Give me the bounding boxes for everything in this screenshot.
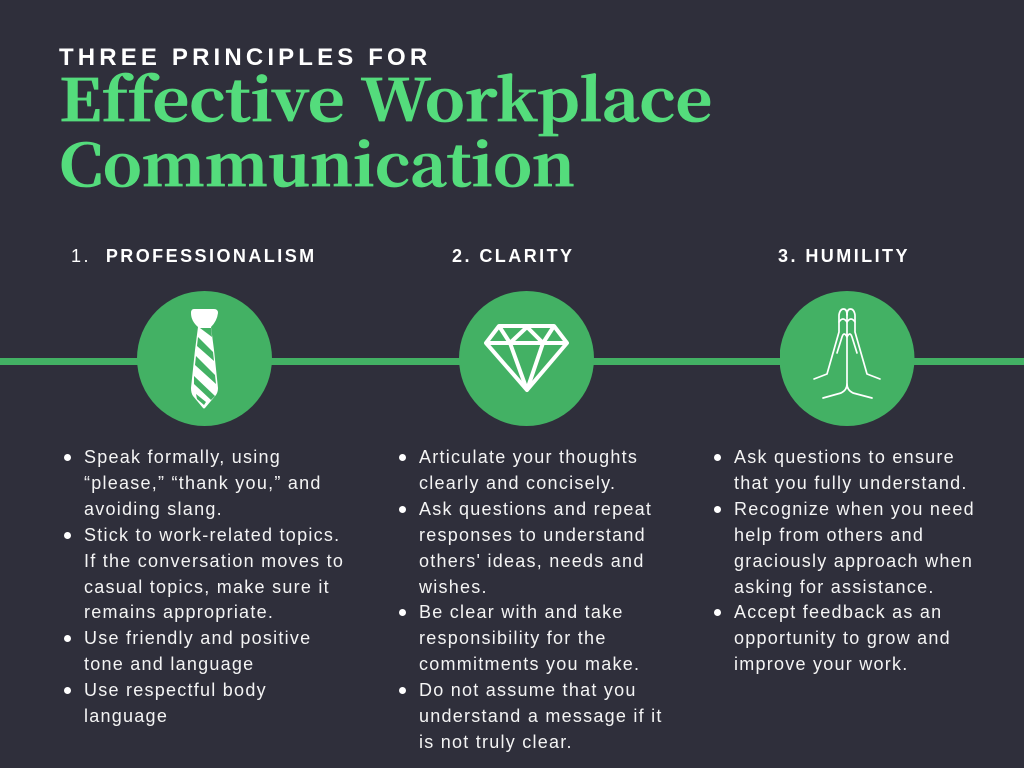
text list: clarity: Articulate your thoughts [419, 447, 638, 467]
heading: humility: 3. HUMILITY [778, 246, 910, 266]
text list: clarity [399, 447, 663, 752]
text list: professionalism: Speak formally, using [84, 447, 281, 467]
text list: professionalism: Stick to work-related topics. [84, 525, 340, 545]
text list: humility: that you fully understand. [734, 473, 968, 493]
main title: Effective Workplace [59, 54, 712, 138]
text list: clarity: Ask questions and repeat [419, 499, 652, 519]
text list: professionalism [64, 447, 344, 726]
icon: necktie [137, 291, 272, 426]
text list: professionalism: language [84, 706, 168, 726]
main title: Communication [59, 119, 575, 203]
text list: clarity: others' ideas, needs and [419, 551, 645, 571]
icon: praying hands [780, 291, 914, 426]
text list: humility: opportunity to grow and [734, 628, 951, 648]
text list: professionalism: avoiding slang. [84, 499, 223, 519]
text list: clarity: understand a message if it [419, 706, 663, 726]
title block [59, 44, 712, 203]
text list: professionalism: tone and language [84, 654, 254, 674]
text list: humility: asking for assistance. [734, 577, 935, 597]
text list: clarity: Be clear with and take [419, 602, 624, 622]
text list: clarity: Do not assume that you [419, 680, 637, 700]
text list: humility [714, 447, 975, 674]
text list: clarity: is not truly clear. [419, 732, 573, 752]
text list: humility: Accept feedback as an [734, 602, 942, 622]
text list: professionalism: casual topics, make sure it [84, 577, 330, 597]
text list: professionalism: If the conversation moves to [84, 551, 344, 571]
text list: humility: Ask questions to ensure [734, 447, 955, 467]
heading: professionalism: 1. PROFESSIONALISM [71, 246, 317, 266]
text list: humility: help from others and [734, 525, 924, 545]
text list: professionalism: remains appropriate. [84, 602, 274, 622]
text list: professionalism: “please,” “thank you,” and [84, 473, 322, 493]
text list: clarity: commitments you make. [419, 654, 640, 674]
timeline line [0, 358, 1024, 365]
text list: clarity: responses to understand [419, 525, 646, 545]
text list: clarity: responsibility for the [419, 628, 607, 648]
text list: clarity: clearly and concisely. [419, 473, 616, 493]
main title [59, 54, 712, 203]
text list: humility: graciously approach when [734, 551, 973, 571]
text list: humility: improve your work. [734, 654, 909, 674]
text list: humility: Recognize when you need [734, 499, 975, 519]
heading: clarity: 2. CLARITY [452, 246, 575, 266]
text list: professionalism: Use friendly and positive [84, 628, 311, 648]
icon: diamond [459, 291, 594, 426]
text list: clarity: wishes. [419, 577, 488, 597]
kicker heading: THREE PRINCIPLES FOR [59, 44, 431, 71]
text list: professionalism: Use respectful body [84, 680, 267, 700]
